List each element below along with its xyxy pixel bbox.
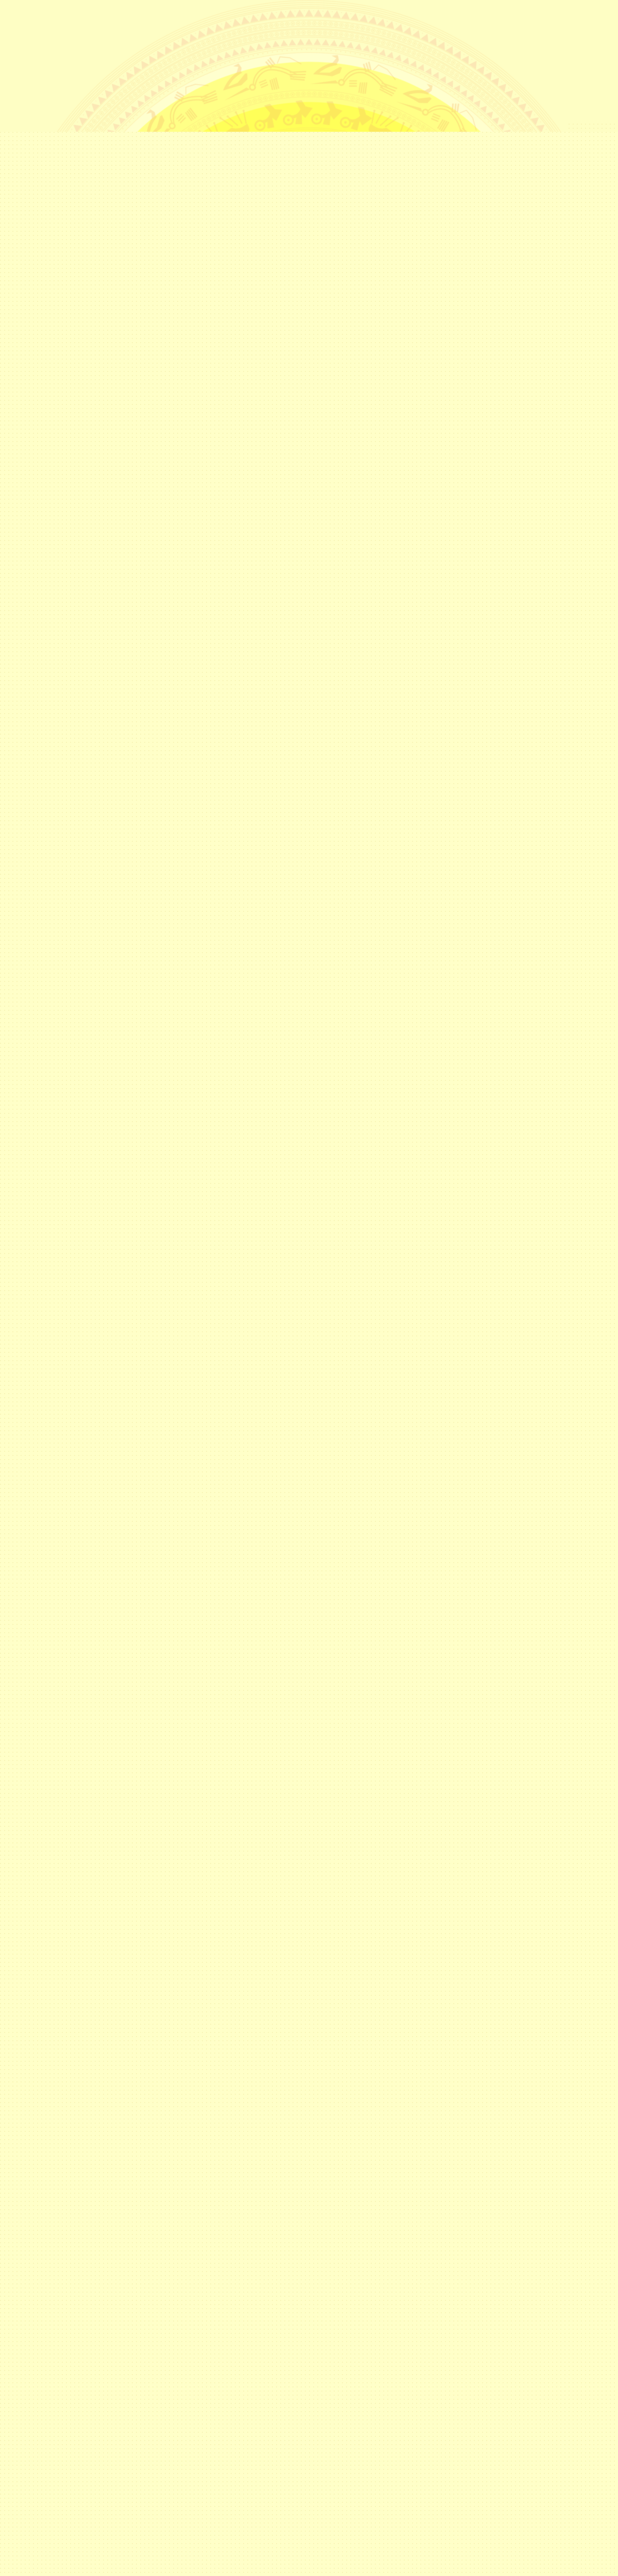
second circle chain band (46, 0, 618, 389)
small birds and deer ring (190, 99, 428, 148)
inner triangle band (80, 0, 608, 379)
concentric ring lines (2, 1, 616, 615)
dotted ring (51, 49, 567, 566)
third circle chain band (150, 0, 507, 323)
first circle chain band (40, 0, 618, 395)
large birds ring (133, 47, 485, 158)
sun disc inner (104, 102, 514, 513)
hero: sun medallion (0, 0, 618, 132)
dotted corner patch (569, 124, 618, 132)
pale ring backing (54, 53, 564, 563)
outer triangle band (55, 0, 618, 387)
sun disc outer (63, 62, 555, 553)
